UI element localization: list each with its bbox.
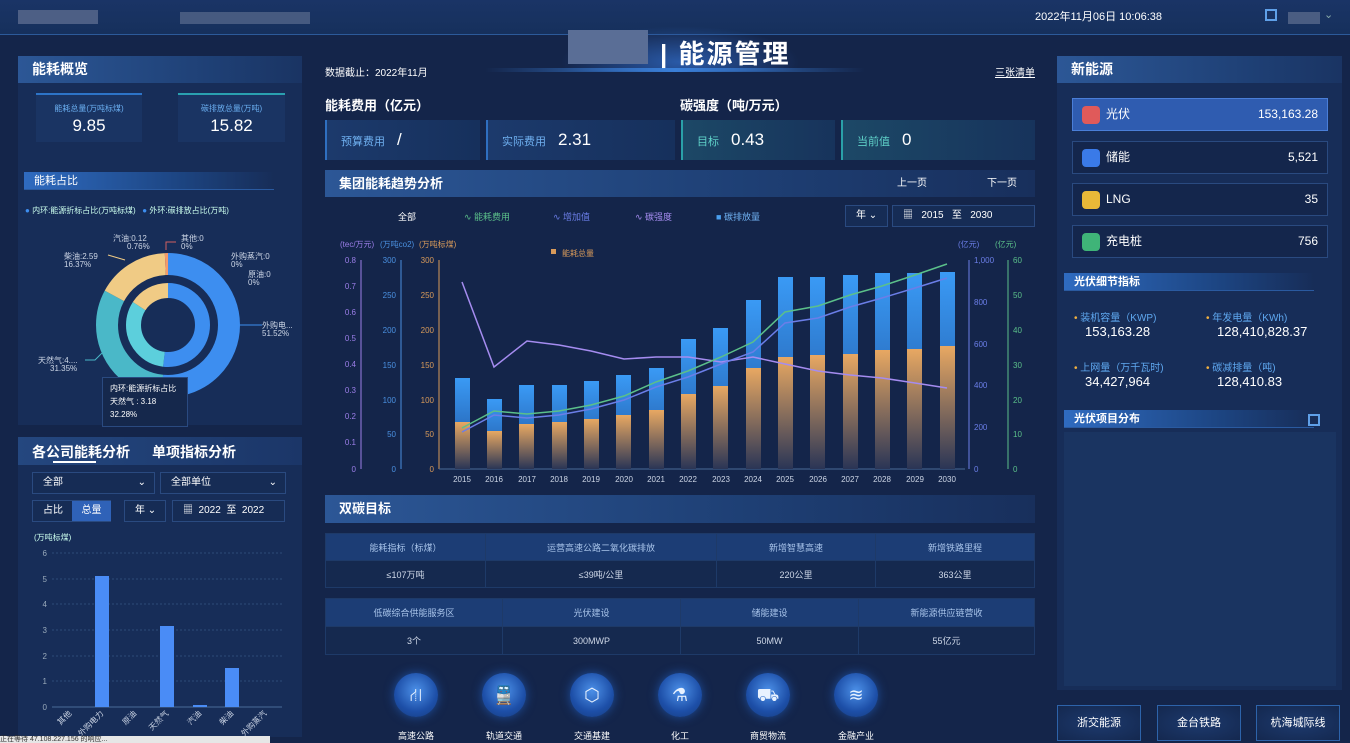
company bar chart: 汽油 bbox=[185, 708, 203, 727]
table 2: 55亿元 bbox=[932, 636, 960, 646]
panel: energy overview bbox=[18, 56, 302, 425]
trend chart: 0 bbox=[974, 465, 979, 474]
trend chart: 2024 bbox=[744, 475, 762, 484]
table 2: 新能源供应链营收 bbox=[910, 608, 982, 618]
toggle: 占比 bbox=[43, 505, 63, 516]
toggle bbox=[32, 500, 111, 522]
text: 商贸物流 bbox=[750, 731, 786, 741]
card current: 当前值 0 bbox=[857, 130, 911, 149]
table 2: 300MWP bbox=[573, 636, 610, 646]
panel: new energy bbox=[1057, 56, 1342, 690]
item pv bbox=[1072, 98, 1328, 131]
item storage bbox=[1072, 141, 1328, 174]
tooltip: 内环:能源折标占比 bbox=[110, 384, 176, 393]
selects: 全部 bbox=[43, 477, 63, 488]
pv stats: • 碳减排量（吨) bbox=[1206, 363, 1276, 374]
panel header: dual carbon bbox=[325, 495, 1035, 523]
panel: new energy: 新能源 bbox=[1071, 61, 1113, 77]
panel header: trend bbox=[325, 170, 1035, 197]
trend chart: 2029 bbox=[906, 475, 924, 484]
header bar bbox=[0, 0, 1350, 35]
card budget: 预算费用 / bbox=[341, 130, 402, 149]
table 2: 储能建设 bbox=[751, 608, 788, 618]
trend chart: 600 bbox=[974, 340, 988, 349]
table 1: 220公里 bbox=[779, 570, 813, 580]
trend chart: 50 bbox=[425, 430, 435, 439]
company bar chart bbox=[34, 532, 282, 738]
panel: company energy analysis: ▦ 2022 至 2022 bbox=[183, 505, 264, 516]
text: 金台铁路 bbox=[1177, 717, 1221, 729]
heading: energy cost: 能耗费用（亿元） bbox=[325, 98, 429, 113]
trend chart: 100 bbox=[383, 396, 397, 405]
table 1: ≤39吨/公里 bbox=[579, 570, 623, 580]
table 1: 运营高速公路二氧化碳排放 bbox=[547, 542, 655, 552]
text: ⛙ bbox=[410, 685, 422, 705]
item pv: 153,163.28 bbox=[1258, 107, 1318, 121]
item pv: 光伏 bbox=[1106, 107, 1130, 121]
heading: 能耗概览 bbox=[32, 61, 88, 77]
table 2 bbox=[325, 598, 1035, 655]
trend chart: 0 bbox=[352, 465, 357, 474]
blurred logo bbox=[18, 10, 98, 24]
table 1: 能耗指标（标煤） bbox=[369, 542, 442, 552]
tabs bbox=[18, 437, 302, 465]
legend: ● 内环:能源折标占比(万吨标煤) ● 外环:碳排放占比(万吨) bbox=[25, 206, 229, 215]
item lng: LNG bbox=[1106, 192, 1131, 206]
table 1: 363公里 bbox=[938, 570, 972, 580]
kpi: total energy: 能耗总量(万吨标煤) bbox=[54, 104, 124, 113]
text: ▦ 2015 至 2030 bbox=[903, 210, 992, 221]
title bbox=[560, 26, 800, 71]
trend chart: 2015 bbox=[453, 475, 471, 484]
kpi: total energy bbox=[36, 93, 142, 142]
text: ≋ bbox=[848, 685, 864, 705]
company bar chart: 柴油 bbox=[217, 708, 235, 727]
pv stats: • 年发电量（KWh) bbox=[1206, 313, 1287, 324]
donut chart: 0% bbox=[231, 260, 243, 269]
trend chart: (亿元) bbox=[995, 239, 1017, 249]
heading bbox=[18, 56, 302, 83]
trend chart: 2025 bbox=[776, 475, 794, 484]
trend chart: (万吨标煤) bbox=[419, 239, 457, 249]
status bar: 正在等待 47.108.227.156 的响应... bbox=[0, 736, 107, 743]
donut chart: 0% bbox=[248, 278, 260, 287]
tooltip: 天然气 : 3.18 bbox=[110, 397, 156, 406]
company bar chart: 外购电力 bbox=[76, 708, 105, 738]
trend chart: 200 bbox=[974, 423, 988, 432]
donut chart: 0.76% bbox=[127, 242, 150, 251]
trend chart: 2019 bbox=[582, 475, 600, 484]
text: 化工 bbox=[671, 731, 689, 741]
trend chart: 0 bbox=[1013, 465, 1018, 474]
table 1 bbox=[325, 533, 1035, 588]
trend chart: 800 bbox=[974, 298, 988, 307]
donut chart: 其他:0 bbox=[181, 233, 204, 243]
company bar chart: 3 bbox=[43, 626, 48, 635]
trend chart: 0.5 bbox=[345, 334, 357, 343]
company bar chart: 外购蒸汽 bbox=[239, 708, 268, 738]
text: ⛟ bbox=[757, 685, 779, 705]
data date: 数据截止：2022年11月 bbox=[325, 68, 428, 79]
panel header: trend: 集团能耗趋势分析 bbox=[339, 176, 443, 191]
pv stats: 153,163.28 bbox=[1085, 324, 1150, 339]
trend chart: 200 bbox=[421, 326, 435, 335]
text: ■ 碳排放量 bbox=[716, 212, 760, 222]
panel: company energy analysis: ⌄ bbox=[269, 477, 277, 488]
donut chart: 外购蒸汽:0 bbox=[231, 251, 270, 261]
trend chart: 0 bbox=[430, 465, 435, 474]
trend chart: 2018 bbox=[550, 475, 568, 484]
panel: company energy analysis: 全部单位 bbox=[171, 477, 211, 488]
trend chart: 150 bbox=[421, 361, 435, 370]
text: ∿ 能耗费用 bbox=[464, 212, 510, 222]
donut chart: 天然气:4.... bbox=[38, 355, 78, 365]
trend chart: 0.1 bbox=[345, 438, 357, 447]
card actual: 实际费用 2.31 bbox=[502, 130, 591, 149]
table 1: 新增铁路里程 bbox=[928, 542, 982, 552]
trend chart: 0 bbox=[392, 465, 397, 474]
trend chart: 20 bbox=[1013, 396, 1022, 405]
donut chart: 51.52% bbox=[262, 329, 289, 338]
text: 全部 bbox=[398, 212, 416, 222]
table 2: 低碳综合供能服务区 bbox=[373, 608, 454, 618]
company bar chart: 0 bbox=[43, 703, 48, 712]
text: 轨道交通 bbox=[486, 731, 522, 741]
trend chart: 300 bbox=[383, 256, 397, 265]
trend chart: 0.8 bbox=[345, 256, 357, 265]
trend chart: 100 bbox=[421, 396, 435, 405]
text: 金融产业 bbox=[838, 731, 874, 741]
status bar bbox=[0, 736, 270, 743]
donut chart: 0% bbox=[181, 242, 193, 251]
item storage: 储能 bbox=[1106, 150, 1130, 164]
link: 三张清单 bbox=[995, 68, 1035, 79]
sub: pv distribution bbox=[1064, 410, 1314, 428]
trend chart: 能耗总量 bbox=[562, 248, 594, 258]
text: 杭海城际线 bbox=[1270, 717, 1326, 729]
trend chart: (tec/万元) bbox=[340, 240, 375, 249]
card actual bbox=[486, 120, 675, 160]
donut chart: 汽油:0.12 bbox=[113, 233, 147, 243]
selects: ⌄ bbox=[138, 477, 146, 488]
donut chart: 柴油:2.59 bbox=[64, 251, 98, 261]
pv stats: 128,410.83 bbox=[1217, 374, 1282, 389]
trend chart: (亿元) bbox=[958, 239, 980, 249]
trend chart: (万吨co2) bbox=[380, 239, 415, 249]
text: 🚆 bbox=[493, 685, 515, 705]
panel header: trend: 下一页 bbox=[987, 178, 1017, 189]
trend chart: 400 bbox=[974, 381, 988, 390]
text: 高速公路 bbox=[398, 731, 434, 741]
pv stats: • 上网量（万千瓦时) bbox=[1074, 363, 1164, 374]
trend chart: 2017 bbox=[518, 475, 536, 484]
trend chart: 50 bbox=[387, 430, 397, 439]
table 2: 50MW bbox=[756, 636, 782, 646]
date time: 2022年11月06日 10:06:38 bbox=[1035, 11, 1162, 23]
industry icons bbox=[388, 668, 884, 741]
trend chart: 2026 bbox=[809, 475, 827, 484]
item charger: 756 bbox=[1298, 234, 1318, 248]
panel: company energy analysis: 年 ⌄ bbox=[135, 505, 156, 516]
donut chart: 原油:0 bbox=[248, 269, 271, 279]
icon: fullscreen bbox=[1265, 9, 1277, 21]
pv stats bbox=[1074, 312, 1307, 389]
panel: company energy analysis: 各公司能耗分析 bbox=[32, 444, 130, 460]
trend chart: 0.6 bbox=[345, 308, 357, 317]
trend chart: 2028 bbox=[873, 475, 891, 484]
trend chart: 60 bbox=[1013, 256, 1022, 265]
text: ∿ 碳强度 bbox=[635, 212, 672, 222]
kpi: carbon total: 碳排放总量(万吨) bbox=[201, 104, 262, 113]
table 1: ≤107万吨 bbox=[387, 570, 424, 580]
map area bbox=[1064, 432, 1336, 686]
card target bbox=[681, 120, 835, 160]
trend filters bbox=[845, 205, 888, 227]
item storage: 5,521 bbox=[1288, 150, 1318, 164]
buttons bbox=[1057, 705, 1141, 741]
trend chart: 2030 bbox=[938, 475, 956, 484]
company bar chart: 1 bbox=[43, 677, 48, 686]
panel header: trend: 上一页 bbox=[897, 178, 927, 189]
blurred nav bbox=[180, 12, 310, 24]
trend filters: 年 ⌄ bbox=[856, 210, 877, 221]
kpi: carbon total bbox=[178, 93, 285, 142]
icon: expand bbox=[1308, 414, 1320, 426]
buttons: 浙交能源 bbox=[1077, 717, 1121, 729]
trend chart: 250 bbox=[383, 291, 397, 300]
panel header: dual carbon: 双碳目标 bbox=[339, 501, 391, 516]
trend legend bbox=[398, 212, 760, 222]
trend chart: 150 bbox=[383, 361, 397, 370]
header bar: ⌄ bbox=[1324, 9, 1333, 21]
selects bbox=[32, 472, 155, 494]
kpi: total energy: 9.85 bbox=[72, 116, 106, 135]
heading: carbon intensity: 碳强度（吨/万元） bbox=[680, 98, 788, 113]
card current bbox=[841, 120, 1035, 160]
company bar chart: 2 bbox=[43, 652, 48, 661]
trend chart: 0.7 bbox=[345, 282, 357, 291]
table 2: 光伏建设 bbox=[573, 608, 610, 618]
panel: company energy analysis: 单项指标分析 bbox=[152, 444, 236, 460]
trend chart: 0.2 bbox=[345, 412, 357, 421]
tooltip bbox=[102, 377, 188, 427]
text: ⬡ bbox=[584, 685, 600, 705]
trend chart bbox=[340, 239, 1022, 484]
pv stats: 128,410,828.37 bbox=[1217, 324, 1307, 339]
trend chart: 50 bbox=[1013, 291, 1022, 300]
donut chart: 外购电... bbox=[262, 320, 293, 330]
toggle: 总量 bbox=[82, 505, 102, 516]
company bar chart: (万吨标煤) bbox=[34, 532, 72, 542]
kpi: carbon total: 15.82 bbox=[210, 116, 253, 135]
text: ∿ 增加值 bbox=[553, 212, 590, 222]
text: ⚗ bbox=[672, 685, 688, 705]
item lng: 35 bbox=[1305, 192, 1318, 206]
sub heading: 能耗占比 bbox=[34, 175, 78, 187]
card budget bbox=[325, 120, 480, 160]
table 2: 3个 bbox=[407, 636, 421, 646]
pv stats: • 装机容量（KWP) bbox=[1074, 313, 1156, 324]
company bar chart: 天然气 bbox=[146, 708, 170, 732]
title: | 能源管理 bbox=[660, 39, 790, 69]
company bar chart: 原油 bbox=[120, 708, 138, 727]
trend chart: 10 bbox=[1013, 430, 1022, 439]
pv stats: 34,427,964 bbox=[1085, 374, 1150, 389]
trend chart: 0.4 bbox=[345, 360, 357, 369]
table 1: 新增智慧高速 bbox=[769, 542, 823, 552]
trend chart: 30 bbox=[1013, 361, 1022, 370]
donut chart bbox=[38, 233, 293, 394]
trend chart: 2016 bbox=[485, 475, 503, 484]
sub: pv distribution: 光伏项目分布 bbox=[1074, 413, 1140, 425]
trend chart: 40 bbox=[1013, 326, 1022, 335]
trend chart: 0.3 bbox=[345, 386, 357, 395]
trend chart: 200 bbox=[383, 326, 397, 335]
sub: pv details: 光伏细节指标 bbox=[1074, 276, 1140, 288]
sub heading bbox=[24, 172, 274, 190]
text: 交通基建 bbox=[574, 731, 610, 741]
trend chart: 2020 bbox=[615, 475, 633, 484]
panel: company energy analysis bbox=[18, 437, 302, 737]
trend chart: 2022 bbox=[679, 475, 697, 484]
item charger bbox=[1072, 225, 1328, 258]
tooltip: 32.28% bbox=[110, 410, 137, 419]
item lng bbox=[1072, 183, 1328, 216]
trend chart: 2021 bbox=[647, 475, 665, 484]
trend chart: 300 bbox=[421, 256, 435, 265]
trend chart: 1,000 bbox=[974, 256, 995, 265]
trend chart: 2027 bbox=[841, 475, 859, 484]
company bar chart: 6 bbox=[43, 549, 48, 558]
donut chart: 31.35% bbox=[50, 364, 77, 373]
company bar chart: 5 bbox=[43, 575, 48, 584]
donut chart: 16.37% bbox=[64, 260, 91, 269]
item charger: 充电桩 bbox=[1106, 234, 1142, 248]
sub: pv details bbox=[1064, 273, 1314, 291]
card target: 目标 0.43 bbox=[697, 130, 764, 149]
trend chart: 250 bbox=[421, 291, 435, 300]
company bar chart: 其他 bbox=[55, 708, 73, 727]
company bar chart: 4 bbox=[43, 600, 48, 609]
trend chart: 2023 bbox=[712, 475, 730, 484]
